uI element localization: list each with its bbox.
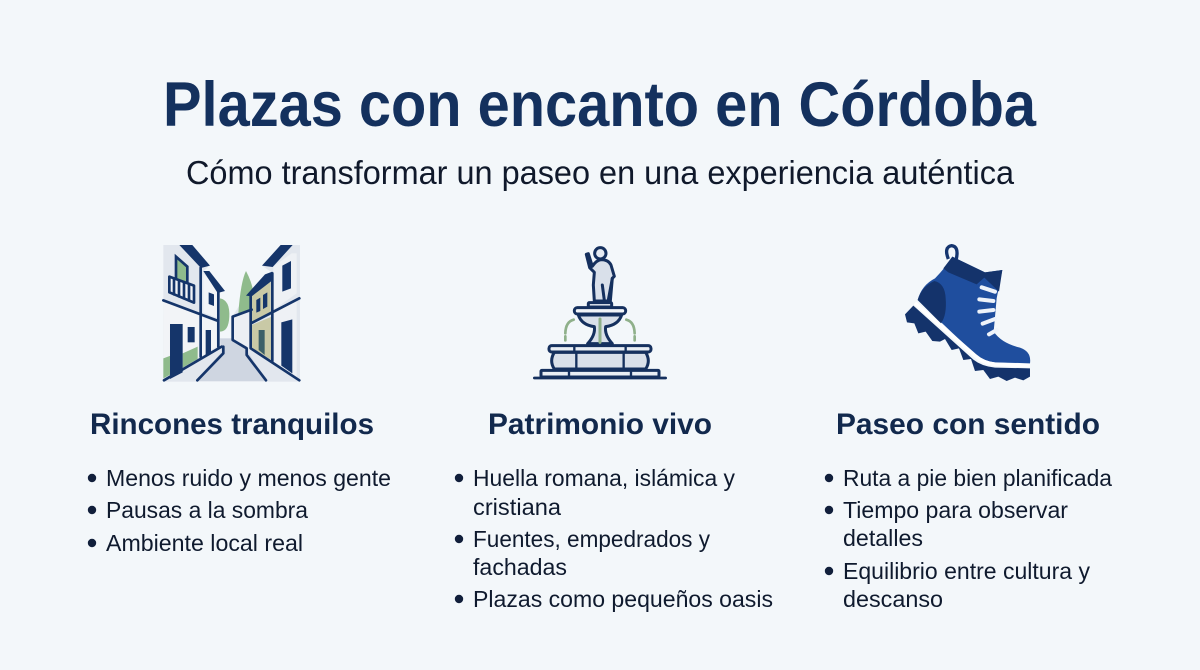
list: patrimonio vivo [455,465,773,612]
panel: paseo con sentido [825,246,1113,612]
list: rincones tranquilos: Menos ruido y menos gente [106,465,391,491]
icon: narrow street with houses [163,245,300,382]
list: paseo con sentido: Ruta a pie bien planificada [843,465,1113,491]
list: paseo con sentido [825,465,1113,612]
title: Plazas con encanto en Córdoba [163,70,1037,140]
list: patrimonio vivo: Fuentes, empedrados y [473,526,710,552]
panel: patrimonio vivo [455,248,773,612]
list: patrimonio vivo: Plazas como pequeños oasis [473,586,773,612]
list: patrimonio vivo: cristiana [473,494,562,520]
list: paseo con sentido: Tiempo para observar [843,497,1068,523]
list: rincones tranquilos: Ambiente local real [106,530,303,556]
heading: patrimonio vivo: Patrimonio vivo [488,408,712,441]
list: rincones tranquilos: Pausas a la sombra [106,497,309,523]
list: patrimonio vivo: fachadas [473,554,567,580]
list: paseo con sentido: Equilibrio entre cultura y [843,558,1090,584]
panel: rincones tranquilos [88,245,391,556]
list: rincones tranquilos [88,465,391,556]
heading: rincones tranquilos: Rincones tranquilos [90,408,374,441]
list: patrimonio vivo: Huella romana, islámica y [473,465,735,491]
subtitle: Cómo transformar un paseo en una experiencia auténtica [186,154,1015,191]
icon: fountain with statue [534,248,666,378]
icon: hiking boot [905,246,1030,381]
heading: paseo con sentido: Paseo con sentido [836,408,1100,441]
list: paseo con sentido: descanso [843,586,943,612]
list: paseo con sentido: detalles [843,525,923,551]
